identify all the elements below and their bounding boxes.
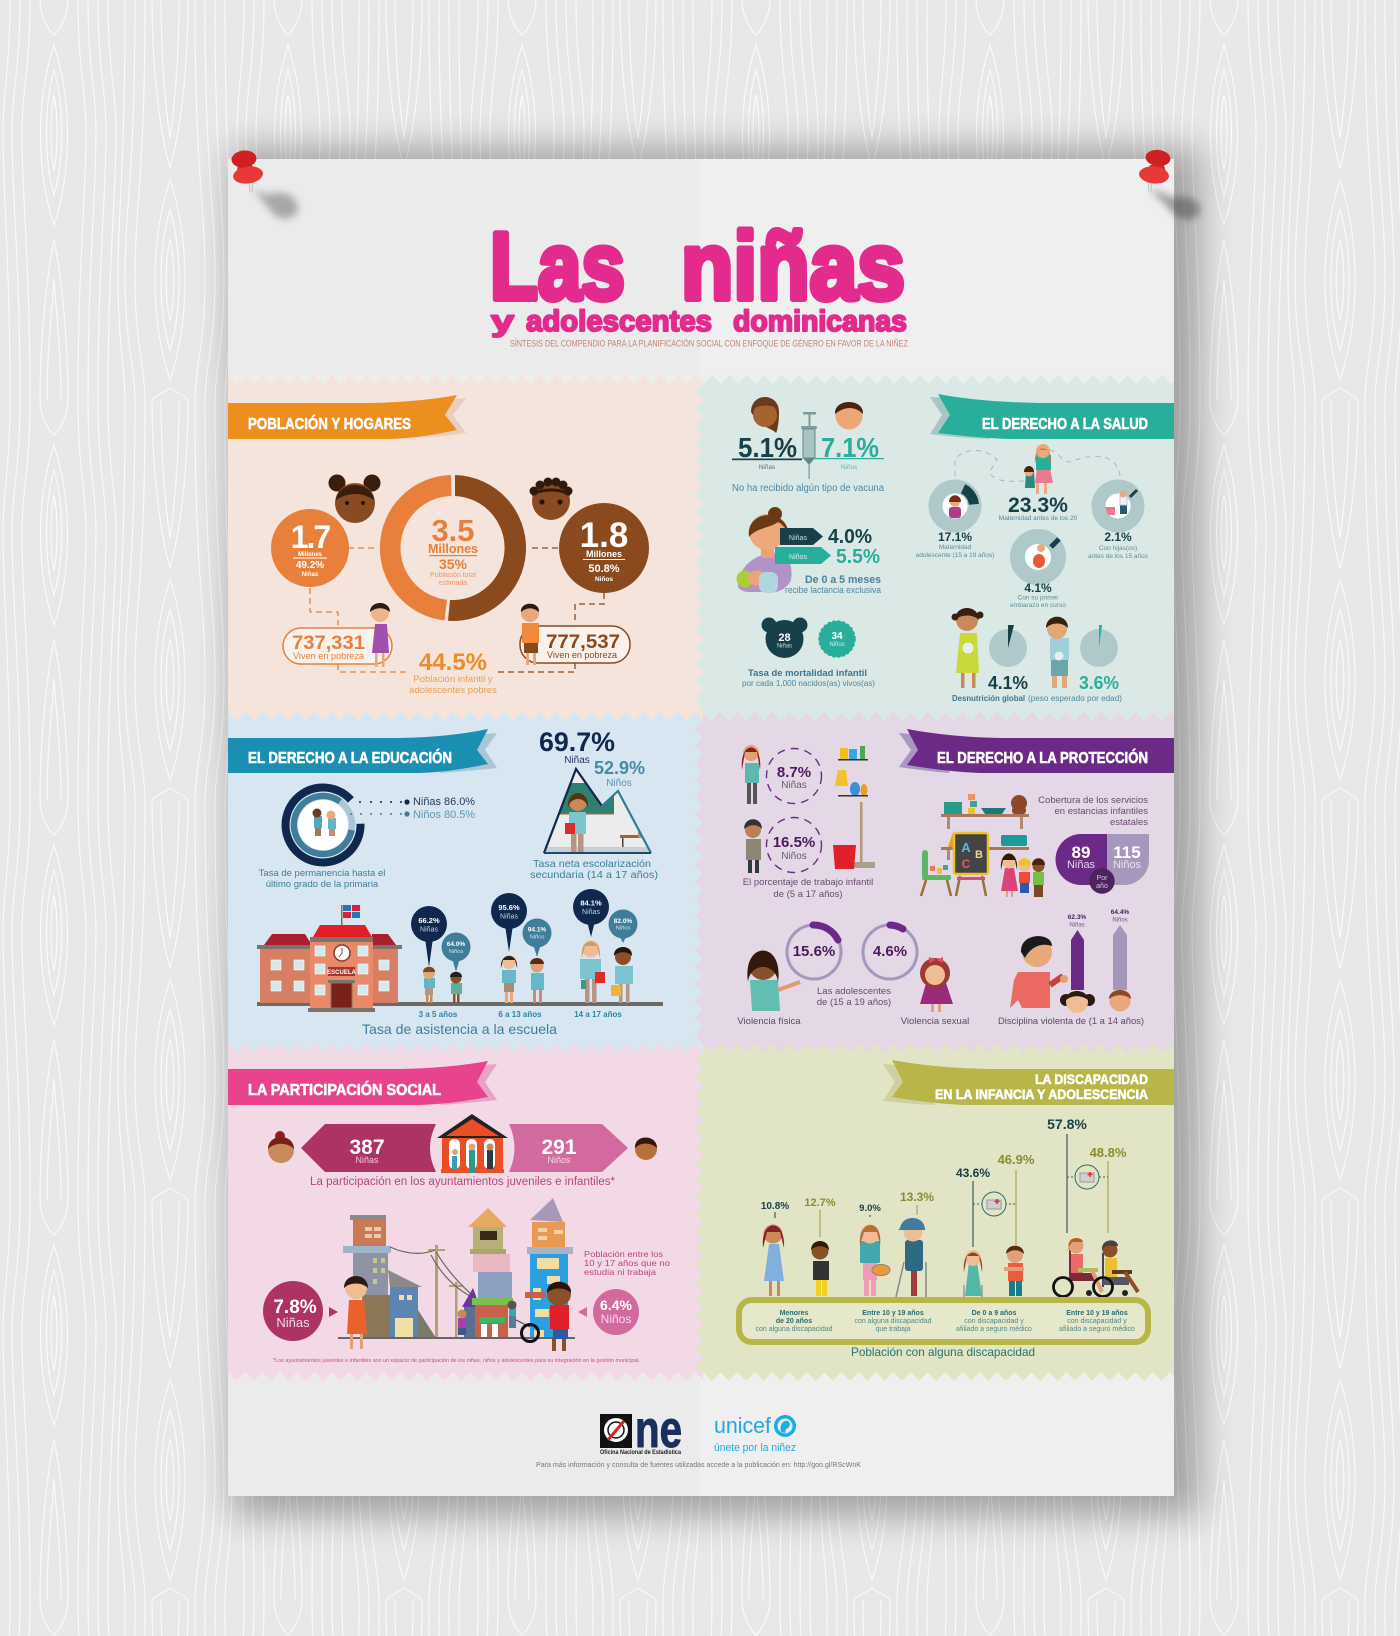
percentages and lines: 13.3% [900, 1190, 934, 1204]
caption: secundaria (14 a 17 años) [530, 869, 658, 881]
caption: Desnutrición global [952, 693, 1025, 703]
banner: salud [930, 394, 1174, 439]
pointer [578, 1307, 587, 1317]
panel: el derecho a la salud [695, 375, 1174, 712]
footnote: *Los ayuntamientos juveniles e infantiles son un espacio de participación de los niñas, niños y adolescentes para su integración en la gestión municipal. [273, 1358, 640, 1364]
bubble: 95.6% niñas: 95.6% [498, 903, 520, 912]
bubble: 84.1% niñas: 84.1% [580, 898, 602, 908]
arrow: 62.3% niñas: Niñas [1069, 922, 1085, 928]
donut: 4.1%: Con su primer [1018, 594, 1059, 602]
logo: ONE [600, 1401, 682, 1459]
pentagon: niñas: Niñas [789, 535, 807, 542]
pie: 3.6% niños: 3.6% [1079, 673, 1119, 693]
donut: 17.1%: 17.1% [938, 530, 972, 544]
arrow: 64.4% niños: 64.4% [1111, 909, 1129, 916]
youth councils [268, 1114, 657, 1188]
donut: 3.5 millones: 3.5 [431, 513, 475, 548]
main title: Las [490, 213, 625, 320]
caption: por cada 1,000 nacidos(as) vivos(as) [742, 679, 875, 688]
caption: Población con alguna discapacidad [851, 1345, 1035, 1359]
caption: en estancias infantiles [1055, 806, 1148, 817]
ground [338, 1337, 575, 1339]
circle: niños 1.8 millones: Millones [586, 549, 622, 559]
stat: 44.5% pobres: adolescentes pobres [409, 685, 497, 696]
donut: 3.5 millones: 35% [439, 556, 468, 572]
caption [584, 1249, 670, 1277]
donut: 2.1%: 2.1% [1104, 530, 1132, 544]
dashed circle: 8.7% niñas: 8.7% [777, 764, 811, 781]
circle: niñas 1.7 millones [271, 509, 349, 587]
circle: niñas 1.7 millones: 49.2% [296, 560, 324, 571]
neither study nor work [263, 1198, 670, 1351]
age labels: 6 a 13 años [498, 1010, 542, 1019]
captions: Violencia física [737, 1016, 801, 1027]
pill: 737,331 [283, 628, 392, 664]
stat: 52.9%: Niños [606, 778, 632, 789]
donut: 2.1%: antes de los 15 años [1088, 553, 1149, 560]
figures: menores de 20 años [763, 1224, 829, 1296]
donut: 17.1%: Maternidad [939, 544, 972, 551]
ring: 4.6% [863, 925, 917, 979]
icon: mop and bucket [833, 802, 875, 869]
bubble: 64.0% niños: 64.0% [447, 941, 465, 948]
caption [742, 668, 875, 688]
figure: girl with plate [952, 608, 984, 688]
caption: La participación en los ayuntamientos juveniles e infantiles* [310, 1176, 616, 1188]
icon: toy shelves and classroom: C [962, 857, 971, 871]
footer [536, 1401, 861, 1469]
caption: Tasa de permanencia hasta el [259, 868, 385, 879]
captions: Violencia sexual [901, 1016, 969, 1027]
stat: 69.7%: Niñas [564, 755, 590, 766]
badge: por año [1089, 868, 1115, 894]
icon: syringe [801, 412, 817, 479]
banner: discapacidad: LA DISCAPACIDAD [1035, 1071, 1148, 1087]
percentages and lines: 46.9% [998, 1152, 1035, 1167]
banner: participación [228, 1061, 497, 1105]
second title line: y [491, 305, 514, 338]
stat: 23.3%: Maternidad antes de los 20 [999, 515, 1078, 522]
figures: students 3 a 5 años [423, 967, 462, 1003]
maternity [916, 444, 1149, 609]
arrow: 62.3% niñas [1068, 914, 1086, 990]
stat: 44.5% pobres [409, 649, 497, 696]
stat: 89 niñas: 89 [1072, 843, 1090, 862]
bubble: 64.0% niños [442, 932, 470, 972]
icon: boy face [635, 1138, 657, 1160]
banner: discapacidad: EN LA INFANCIA Y ADOLESCENCIA [935, 1086, 1148, 1102]
figure: boy [547, 1282, 571, 1351]
icon: girl face [268, 1131, 294, 1163]
rounded label box: con discapacidad y [1067, 1318, 1127, 1325]
age labels: 3 a 5 años [419, 1010, 458, 1019]
rounded label box: con alguna discapacidad [755, 1326, 833, 1333]
rounded label box: que trabaja [875, 1326, 911, 1333]
title [490, 213, 908, 350]
caption [530, 858, 658, 881]
icon: girl head [1060, 991, 1095, 1013]
percentages and lines: 12.7% [804, 1197, 836, 1209]
captions [737, 986, 969, 1027]
dashed connectors [310, 548, 604, 672]
second title line [491, 305, 907, 338]
donut: 17.1%: adolescente (15 a 19 años) [916, 552, 994, 559]
logo: unicef: únete por la niñez [714, 1442, 796, 1454]
arrow: 291 niños: Niños [547, 1155, 571, 1165]
caption [952, 693, 1122, 703]
ground line [257, 1002, 663, 1006]
rounded label box: afiliado a seguro médico [1059, 1326, 1135, 1333]
badge: por año: Por [1097, 875, 1108, 882]
caption [743, 877, 873, 900]
icon: girl face [328, 474, 380, 523]
donut: 3.5 millones: Millones [428, 542, 478, 556]
zigzag edges [228, 375, 1174, 1381]
dashed circle: 8.7% niñas [766, 748, 822, 804]
breastfeeding [736, 507, 881, 595]
stat: 115 niños: 115 [1113, 843, 1141, 862]
main title [490, 213, 905, 320]
figures: students 14 a 17 años [580, 940, 633, 1003]
bubble: 94.1% niños: 94.1% [528, 926, 546, 934]
donut: 4.1% [1010, 536, 1066, 609]
icon: girl face [751, 397, 779, 433]
stat: 7.8% niñas: Niñas [276, 1315, 310, 1330]
city illustration [338, 1198, 575, 1351]
dots and labels: Niñas 86.0% [413, 796, 475, 808]
rounded label box: afiliado a seguro médico [956, 1326, 1032, 1333]
second title line: adolescentes [526, 305, 712, 338]
ring: 4.6%: 4.6% [873, 943, 907, 960]
banner: educación [228, 729, 497, 773]
infant mortality [742, 618, 875, 688]
arrow: 387 niñas: Niñas [355, 1155, 379, 1165]
stat: 6.4% niños [593, 1289, 639, 1335]
caption: De 0 a 5 meses [805, 574, 881, 586]
panel: población y hogares [228, 375, 695, 712]
stat: 6.4% niños: 6.4% [600, 1297, 633, 1313]
rounded label box: con alguna discapacidad [854, 1318, 932, 1325]
secondary enrolment mountain [530, 727, 658, 881]
banner: educación: EL DERECHO A LA EDUCACIÓN [248, 748, 452, 767]
poster sheet [228, 159, 1174, 1496]
vaccine comparison [732, 397, 884, 494]
figure: girl physical violence [747, 950, 800, 1011]
stat: 44.5% pobres: 44.5% [419, 649, 487, 676]
logo: ONE: ne [635, 1401, 682, 1459]
stat: 115 niños [1107, 834, 1149, 885]
school attendance [257, 889, 663, 1037]
right tower [525, 1198, 573, 1338]
icon: boy head [1109, 990, 1131, 1012]
second title line: dominicanas [733, 305, 907, 338]
figure: boy with plate [1046, 617, 1069, 688]
dashed circle: 8.7% niñas: Niñas [781, 780, 807, 791]
arrow: 64.4% niños [1111, 909, 1129, 990]
circle: niñas 1.7 millones: Millones [298, 552, 323, 558]
banner: protección: EL DERECHO A LA PROTECCIÓN [937, 748, 1148, 767]
arrow: 291 niños: 291 [541, 1136, 577, 1159]
figure: girl [742, 745, 760, 804]
rounded label box: de 20 años [776, 1318, 812, 1325]
figures: entre 10 y 19 años trabaja [860, 1218, 926, 1297]
figure: boy in orange [521, 604, 539, 665]
icon: school building [257, 905, 402, 1012]
child labour [742, 745, 875, 900]
captions: Las adolescentes [817, 986, 891, 997]
icon: mortality niñas: Niñas [777, 644, 792, 650]
panel: el derecho a la educación [228, 712, 695, 1044]
figure: shouting man [1010, 936, 1068, 1008]
stat: 4.0%: 4.0% [828, 526, 872, 548]
stat: 5.1% niñas: 5.1% [738, 432, 797, 463]
stat: 44.5% pobres: Población infantil y [413, 674, 493, 685]
donut: 2.1% [1088, 486, 1149, 560]
captions: de (15 a 19 años) [817, 997, 891, 1008]
percentages and lines: 57.8% [1047, 1116, 1087, 1132]
bubble: 95.6% niñas [491, 893, 527, 952]
caption: estatales [1110, 817, 1148, 828]
bubble: 94.1% niños: Niños [530, 934, 545, 940]
stat: 69.7%: 69.7% [539, 727, 615, 757]
caption [1038, 795, 1148, 828]
caption [785, 574, 881, 595]
caption: El porcentaje de trabajo infantil [743, 877, 873, 888]
stat: 5.5%: 5.5% [836, 546, 880, 568]
caption: último grado de la primaria [266, 879, 379, 890]
bubble: 84.1% niñas [573, 889, 609, 937]
rounded label box: Menores [780, 1310, 808, 1317]
icon: insurance card 1 [973, 1192, 1016, 1216]
stat: 6.4% niños: Niños [601, 1312, 631, 1326]
poles and wires [390, 1245, 470, 1338]
caption: Cobertura de los servicios [1038, 795, 1148, 806]
caption: (peso esperado por edad) [1028, 693, 1122, 703]
stat: 7.1% niños: Niños [841, 464, 858, 471]
icon: mortality niñas: 28 [778, 632, 791, 644]
bubble: 66.2% niñas: 66.2% [418, 916, 440, 925]
icon: school building: ESCUELA [327, 970, 357, 976]
logo: unicef: unicef [714, 1413, 772, 1438]
circle: niñas 1.7 millones: Niñas [302, 572, 319, 578]
stat: 7.8% niñas [263, 1281, 323, 1341]
caption: recibe lactancia exclusiva [785, 585, 881, 595]
caption: de (5 a 17 años) [773, 889, 843, 900]
pentagon: niños: Niños [789, 554, 807, 561]
figures: two students [312, 808, 336, 836]
banner: participación: LA PARTICIPACIÓN SOCIAL [248, 1080, 441, 1099]
pie: 4.1% niñas: 4.1% [988, 673, 1028, 693]
badge: por año: año [1096, 883, 1108, 890]
bubble: 84.1% niñas: Niñas [582, 909, 600, 916]
ring chart: permanencia [259, 787, 475, 890]
left tower [343, 1215, 436, 1338]
circle: niños 1.8 millones: 1.8 [580, 516, 628, 555]
percentages and lines: 10.8% [761, 1201, 789, 1212]
subtitle: SÍNTESIS DEL COMPENDIO PARA LA PLANIFICACIÓN SOCIAL CON ENFOQUE DE GÉNERO EN FAVOR DE LA NIÑEZ [510, 338, 908, 350]
panel: el derecho a la protección [695, 712, 1174, 1044]
bubble: 64.0% niños: Niños [449, 949, 464, 955]
figure: kid with tire [508, 1300, 538, 1342]
poster shadow [232, 148, 1200, 1516]
pill: 737,331: 737,331 [292, 633, 365, 654]
dashed circle: 16.5% niños: 16.5% [773, 834, 815, 851]
stat: 23.3%: 23.3% [1008, 494, 1068, 517]
ring: 15.6%: 15.6% [793, 943, 835, 960]
figures: students 6 a 13 años [501, 955, 544, 1003]
banner: salud: EL DERECHO A LA SALUD [982, 416, 1148, 433]
arrow: 64.4% niños: Niños [1112, 918, 1128, 924]
figure: boy [744, 819, 762, 873]
banner: población y hogares [228, 395, 466, 439]
age labels [419, 1010, 622, 1019]
icon: toy shelves and classroom: A [961, 840, 971, 855]
caption: estudia ni trabaja [584, 1267, 656, 1277]
figures: wheelchair users [1054, 1238, 1138, 1296]
figures: three children [1001, 854, 1045, 897]
caption: No ha recibido algún tipo de vacuna [732, 483, 884, 494]
icon: boy face [530, 478, 572, 520]
donut: 3.5 millones [380, 475, 526, 621]
icon: mortality niñas [762, 618, 808, 658]
dots and labels: Niños 80.5% [413, 809, 475, 821]
stat: 89 niñas [1056, 834, 1107, 885]
stat: 52.9%: 52.9% [594, 758, 645, 778]
pointer [329, 1307, 338, 1317]
bubble: 94.1% niños [522, 918, 552, 957]
figure: girl sexual violence [920, 957, 953, 1012]
icon: mountain classroom [540, 765, 655, 855]
icon: toy shelves and classroom [921, 794, 1029, 896]
pie: 4.1% niñas [988, 625, 1028, 693]
donut: 4.1%: embarazo en curso [1010, 602, 1066, 609]
stat: 89 niñas: Niñas [1067, 859, 1096, 871]
icon: boy face [835, 402, 863, 430]
bubble: 82.0% niños: Niños [616, 926, 631, 932]
percentages and lines: 43.6% [956, 1166, 990, 1180]
percentages and lines [761, 1116, 1127, 1247]
circle: niñas 1.7 millones: 1.7 [291, 519, 330, 555]
pie: 3.6% niños [1079, 625, 1119, 693]
stat: 7.8% niñas: 7.8% [273, 1297, 317, 1318]
icon: mortality niños [819, 621, 855, 657]
banner: protección [899, 729, 1174, 773]
pill: 777,537 [520, 626, 630, 663]
pill: 737,331: Viven en pobreza [293, 651, 364, 661]
donut: 2.1%: Con hijas(os) [1099, 545, 1137, 552]
childcare coverage [921, 794, 1149, 897]
icon: mortality niños: Niños [829, 642, 845, 648]
banner: discapacidad [883, 1060, 1174, 1105]
arrow: 387 niñas: 387 [349, 1136, 385, 1159]
arrow: 387 niñas [301, 1124, 436, 1172]
source line: Para más información y consulta de fuentes utilizadas accede a la publicación en: http://goo.gl/RScWnK [536, 1462, 861, 1469]
icon: cleaning shelves [835, 746, 868, 796]
stat: 23.3% [999, 494, 1078, 522]
caption: Tasa de asistencia a la escuela [362, 1021, 557, 1037]
figure: mother and baby [736, 507, 792, 593]
arrow: 291 niños [509, 1124, 628, 1172]
dots and labels [350, 796, 475, 821]
caption: Disciplina violenta de (1 a 14 años) [998, 1016, 1144, 1027]
caption: 10 y 17 años que no [584, 1258, 670, 1268]
pill: 777,537: 777,537 [546, 632, 620, 653]
percentages and lines: 9.0% [859, 1203, 881, 1214]
caption: Tasa neta escolarización [533, 858, 651, 870]
stat: 115 niños: Niños [1113, 859, 1142, 871]
dashed circle: 16.5% niños: Niños [781, 851, 807, 862]
donut: 3.5 millones: Población total [430, 572, 476, 579]
circle: niños 1.8 millones [559, 503, 649, 593]
donut: 3.5 millones: estimada [439, 580, 467, 587]
figures: de 0 a 9 años [964, 1246, 1024, 1297]
logo: unicef [714, 1413, 796, 1454]
percentages and lines: 48.8% [1090, 1145, 1127, 1160]
pentagon: niños [775, 547, 831, 564]
rounded label box: Entre 10 y 19 años [1066, 1310, 1128, 1317]
arrow: 62.3% niñas: 62.3% [1068, 914, 1086, 921]
ring: 15.6% [787, 925, 841, 979]
stat: 7.1% niños: 7.1% [821, 432, 879, 463]
dashed arcs [955, 450, 1120, 481]
bubble: 66.2% niñas: Niñas [420, 926, 438, 934]
rounded label box: De 0 a 9 años [972, 1310, 1016, 1317]
circle: niños 1.8 millones: 50.8% [588, 563, 620, 575]
pentagon: niñas [780, 528, 823, 545]
caption [259, 868, 385, 890]
circle: niños 1.8 millones: Niños [595, 576, 613, 583]
age labels: 14 a 17 años [574, 1010, 622, 1019]
bubble: 82.0% niños: 82.0% [614, 918, 632, 925]
violent discipline [998, 909, 1144, 1027]
donut: 4.1%: 4.1% [1024, 581, 1052, 595]
icon: toy shelves and classroom: B [975, 849, 983, 861]
figure: girl [344, 1276, 368, 1349]
figure: mother and daughter [1024, 444, 1053, 494]
logo: ONE: Oficina Nacional de Estadística [600, 1450, 682, 1456]
figure: girl in purple [370, 603, 390, 667]
main title: niñas [681, 213, 905, 320]
panel: la discapacidad [695, 1044, 1174, 1372]
bubble: 95.6% niñas: Niñas [500, 914, 518, 920]
bubble: 66.2% niñas [411, 906, 447, 967]
caption: Población entre los [584, 1249, 663, 1259]
caption: Tasa de mortalidad infantil [748, 668, 867, 679]
stat: 52.9% [594, 758, 645, 789]
rounded label box: Entre 10 y 19 años [862, 1310, 924, 1317]
panel: la participación social [228, 1044, 695, 1372]
icon: insurance card 2 [1067, 1165, 1108, 1189]
rounded label box [739, 1300, 1148, 1342]
pill: 777,537: Viven en pobreza [547, 650, 617, 660]
icon: council building [437, 1114, 508, 1173]
donut: 17.1% [916, 486, 994, 559]
figure: small girl [458, 1310, 466, 1335]
bubble: 82.0% niños [608, 910, 638, 943]
icon: mortality niños: 34 [831, 631, 843, 642]
icon: right push pin [1138, 149, 1200, 219]
malnutrition [952, 608, 1122, 703]
rounded label box: con discapacidad y [964, 1318, 1024, 1325]
icon: left push pin [231, 149, 298, 219]
banner: población y hogares: POBLACIÓN Y HOGARES [248, 414, 411, 433]
dashed circle: 16.5% niños [766, 818, 822, 872]
adolescent violence [737, 925, 969, 1027]
stat: 5.1% niñas: Niñas [759, 464, 776, 471]
middle houses [462, 1208, 513, 1338]
